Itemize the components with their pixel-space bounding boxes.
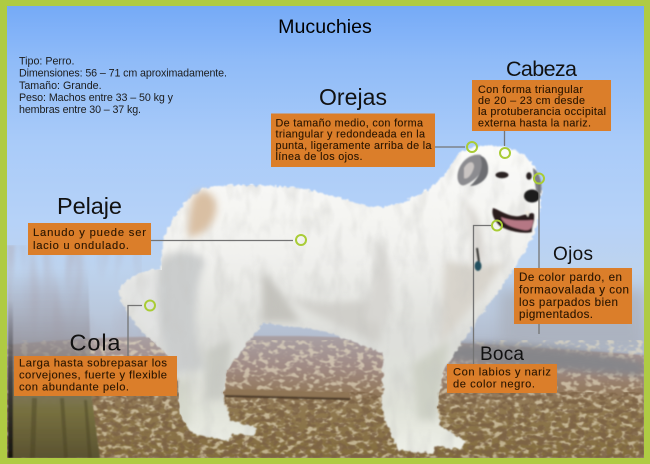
label: Ojos: De color pardo, en [519, 271, 622, 284]
label: Cola: corvejones, fuerte y flexible [19, 370, 167, 382]
dog body [119, 146, 541, 454]
label: Orejas: punta, ligeramente arriba de la [276, 140, 432, 152]
label: Pelaje: Lanudo y puede ser [33, 227, 146, 239]
label: Pelaje: lacio u ondulado. [33, 240, 129, 252]
right mist [500, 290, 644, 350]
label: Boca [447, 344, 557, 393]
label: Cola: Cola [70, 330, 121, 356]
neck shadow [462, 200, 482, 262]
label: Cabeza [472, 57, 611, 131]
distant misty trees [7, 245, 140, 318]
label: Cabeza: de 20 – 23 cm desde [478, 95, 585, 107]
ground speckle dark [7, 392, 644, 458]
connector lines [128, 131, 539, 364]
title: Mucuchies [278, 16, 372, 38]
label: Orejas: De tamaño medio, con forma [276, 118, 423, 130]
label: Cabeza: externa hasta la nariz. [478, 118, 591, 130]
info text block: Tipo: Perro. [19, 56, 74, 68]
label: Ojos: Ojos [553, 244, 593, 265]
info text block: Dimensiones: 56 – 71 cm aproximadamente. [19, 68, 227, 80]
stick on ground [225, 389, 350, 400]
body shading [123, 154, 528, 453]
label: Cola: Larga hasta sobrepasar los [19, 358, 167, 370]
marker circles [145, 142, 544, 310]
tree trunk [8, 270, 100, 458]
ground speckle light [7, 340, 644, 458]
label: Boca: Con labios y nariz [453, 366, 551, 378]
eye side patch [533, 168, 542, 194]
ground [7, 336, 644, 458]
label: Cabeza: Con forma triangular [478, 84, 583, 96]
collar tag [474, 248, 482, 271]
info text block: Tamaño: Grande. [19, 80, 102, 92]
label: Orejas [271, 84, 435, 167]
label: Ojos [514, 244, 632, 324]
label: Cola: con abundante pelo. [19, 382, 129, 394]
label: Orejas: línea de los ojos. [276, 151, 362, 163]
ear [457, 155, 488, 186]
mouth [492, 208, 534, 233]
label: Boca: de color negro. [453, 378, 535, 390]
label: Pelaje [28, 193, 151, 255]
info text block: hembras entre 30 – 37 kg. [19, 104, 141, 116]
label: Orejas: Orejas [319, 84, 387, 110]
label: Ojos: formaovalada y con [519, 284, 629, 296]
dog illustration [110, 140, 550, 460]
label: Ojos: pigmentados. [519, 308, 593, 321]
label: Pelaje: Pelaje [57, 193, 122, 219]
fur strand texture [138, 154, 528, 453]
label: Boca: Boca [480, 344, 524, 365]
label: Orejas: triangular y redondeada en la [276, 128, 425, 140]
label: Ojos: los parpados bien [519, 296, 618, 309]
info text block: Peso: Machos entre 33 – 50 kg y [19, 92, 174, 104]
label: Cola [14, 330, 177, 396]
far fallen log [445, 344, 644, 376]
info text block [19, 56, 227, 116]
label: Cabeza: Cabeza [506, 57, 577, 81]
tan patch on rump [188, 192, 216, 236]
nose [524, 190, 540, 202]
label: Cabeza: la protuberancia occipital [478, 106, 606, 118]
eyes [496, 172, 532, 180]
